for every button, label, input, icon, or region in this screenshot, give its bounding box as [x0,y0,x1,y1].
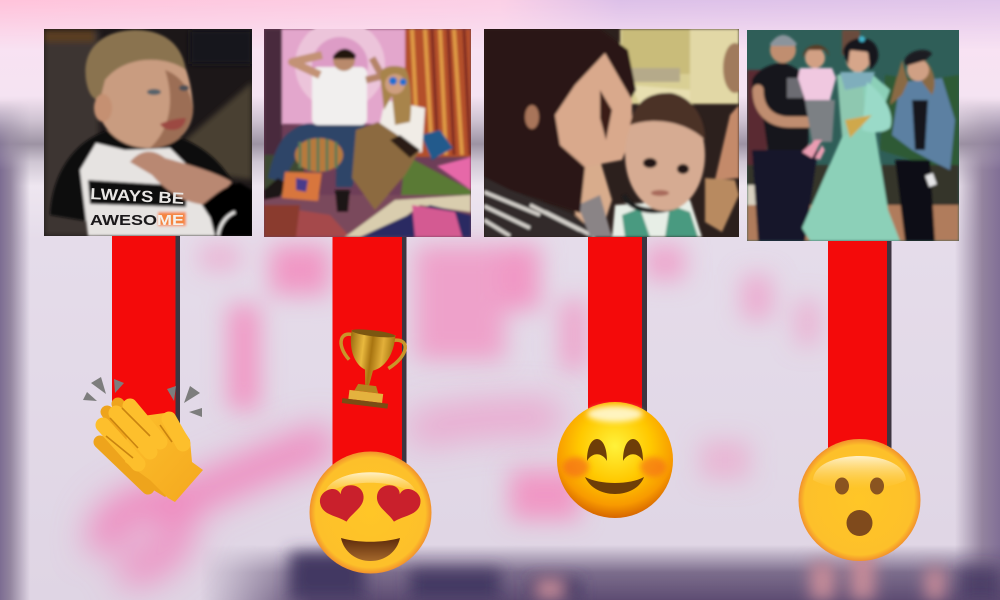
photo 1: toddler in raglan shirt: LWAYS BE [90,186,185,208]
ribbon 3 [588,237,647,413]
icon: clapping hands [83,377,203,502]
ribbon 4 [828,241,892,449]
photo 4: family with princess character [747,30,959,241]
icon: smiling face [557,402,673,518]
icon: surprised face [798,439,920,561]
photo 1: toddler in raglan shirt: AWESO ME [90,212,184,229]
ribbon 1 [112,236,180,426]
icon: heart-eyes face [310,452,432,574]
ribbon 2 [332,237,406,465]
photo 1: toddler in raglan shirt [44,29,252,236]
photo 3: woman kissing baby [484,29,747,237]
photo 2: couple on colourful textiles [264,20,471,237]
icon: trophy [334,327,407,410]
